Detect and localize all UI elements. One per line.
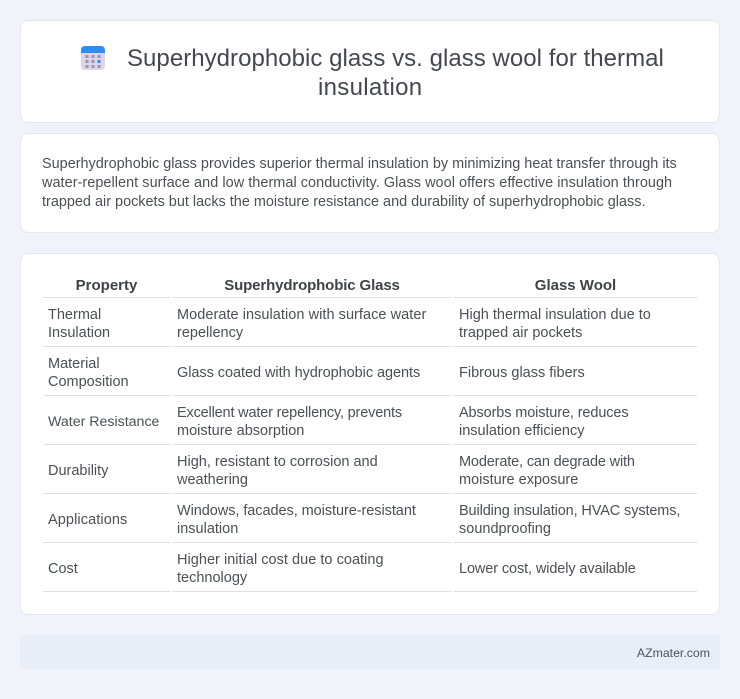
row: thermal insulation: Moderate insulation with surface water <box>177 307 426 323</box>
row: material composition <box>48 356 585 390</box>
row: material composition: Glass coated with hydrophobic agents <box>177 365 420 381</box>
footer brand: AZmater.com <box>637 646 710 660</box>
row: material composition: Composition <box>48 374 129 390</box>
row: applications: soundproofing <box>459 521 551 537</box>
summary text: Superhydrophobic glass provides superior thermal insulation by minimizing heat transfer through its <box>42 156 677 172</box>
table header: Glass Wool <box>535 277 616 294</box>
panel: summary <box>20 133 720 233</box>
panel: title <box>20 20 720 123</box>
icon: calendar <box>81 46 105 70</box>
row: cost: Cost <box>48 561 78 577</box>
row: applications: insulation <box>177 521 238 537</box>
row: thermal insulation: trapped air pockets <box>459 325 582 341</box>
row: durability: moisture exposure <box>459 472 578 488</box>
row: thermal insulation <box>48 307 651 341</box>
row: durability: weathering <box>177 472 248 488</box>
row: durability <box>48 454 635 488</box>
row: material composition: Material <box>48 356 100 372</box>
row: water resistance: moisture absorption <box>177 423 304 439</box>
table header: Superhydrophobic Glass <box>224 277 400 294</box>
row: durability: High, resistant to corrosion and <box>177 454 378 470</box>
row: water resistance <box>48 405 628 439</box>
row: applications: Windows, facades, moisture-resistant <box>177 503 416 519</box>
row: water resistance: insulation efficiency <box>459 423 584 439</box>
panel: comparison table <box>20 253 720 615</box>
summary text <box>42 156 677 210</box>
summary text: trapped air pockets but lacks the moisture resistance and durability of superhydrophobic glass. <box>42 194 646 210</box>
title: Superhydrophobic glass vs. glass wool for thermal <box>127 45 664 72</box>
row: cost: technology <box>177 570 247 586</box>
title: insulation <box>318 74 422 101</box>
row: thermal insulation: High thermal insulation due to <box>459 307 651 323</box>
row: thermal insulation: Insulation <box>48 325 110 341</box>
row: water resistance: Absorbs moisture, reduces <box>459 405 628 421</box>
row: material composition: Fibrous glass fibers <box>459 365 585 381</box>
row: applications <box>48 503 680 537</box>
row: cost: Lower cost, widely available <box>459 561 636 577</box>
row: cost: Higher initial cost due to coating <box>177 552 384 568</box>
row: thermal insulation: repellency <box>177 325 243 341</box>
table header <box>76 277 616 294</box>
row: water resistance: Excellent water repellency, prevents <box>177 405 402 421</box>
row: applications: Building insulation, HVAC systems, <box>459 503 680 519</box>
row: durability: Moderate, can degrade with <box>459 454 635 470</box>
row: water resistance: Water Resistance <box>48 414 159 430</box>
row: cost <box>48 552 636 586</box>
row: durability: Durability <box>48 463 108 479</box>
row: thermal insulation: Thermal <box>48 307 101 323</box>
row: applications: Applications <box>48 512 127 528</box>
table header: Property <box>76 277 137 294</box>
summary text: water-repellent surface and low thermal conductivity. Glass wool offers effective insulation through <box>42 175 672 191</box>
footer bar <box>20 635 720 669</box>
title <box>127 45 664 101</box>
